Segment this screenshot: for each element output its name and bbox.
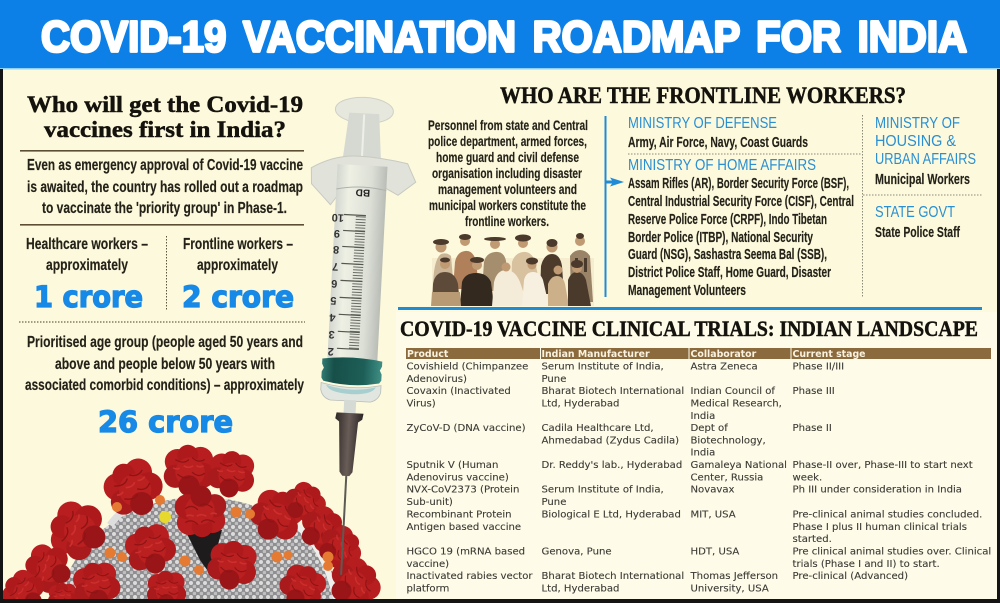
- row: NVX-CoV2373: Ph III under consideration in India: [792, 484, 962, 496]
- table header row: Indian Manufacturer: [542, 349, 650, 360]
- row: NVX-CoV2373: NVX-CoV2373 (Protein: [406, 484, 519, 496]
- stat: healthcare workers: [26, 236, 148, 314]
- group: ministry of home affairs: Reserve Police Force (CRPF), Indo Tibetan: [628, 212, 827, 228]
- row: Covaxin: Ltd, Hyderabad: [542, 398, 619, 410]
- table header row: Current stage: [792, 349, 866, 360]
- row: HGCO 19: [406, 546, 991, 570]
- row: Covaxin: Indian Council of: [690, 386, 775, 397]
- row: Covishield: Covishield (Chimpanzee: [406, 362, 528, 372]
- needle neck: [344, 400, 356, 414]
- row: ZyCoV-D: Cadila Healthcare Ltd,: [542, 423, 654, 434]
- group: ministry of home affairs: [628, 157, 854, 299]
- row: NVX-CoV2373: Serum Institute of India,: [542, 484, 664, 496]
- row: Recombinant Protein: Biological E Ltd, Hyderabad: [542, 510, 681, 520]
- row: HGCO 19: trials (Phase I and II) to start.: [792, 559, 940, 570]
- frontline description: home guard and civil defense: [436, 149, 579, 165]
- icon: syringe: 4: [328, 311, 336, 323]
- row: ZyCoV-D: Phase II: [792, 423, 832, 434]
- row: Covaxin: Phase III: [792, 386, 835, 397]
- row: Inactivated rabies vector: Pre-clinical (Advanced): [792, 571, 908, 582]
- frontline description: management volunteers and: [438, 181, 577, 197]
- row: Covishield: Phase II/III: [792, 362, 844, 372]
- row: NVX-CoV2373: Pune: [542, 497, 566, 508]
- group: ministry of home affairs: District Police Staff, Home Guard, Disaster: [628, 265, 831, 281]
- front row: [432, 272, 460, 306]
- row: Recombinant Protein: [406, 510, 982, 545]
- frontline description: organisation including disaster: [432, 165, 582, 181]
- stat: frontline workers: Frontline workers –: [183, 236, 293, 253]
- back row: [433, 253, 454, 290]
- frontline description: [428, 117, 588, 229]
- frontline description: municipal workers constitute the: [429, 197, 586, 213]
- row: HGCO 19: Pre clinical animal studies over. Clinical: [792, 546, 991, 558]
- row: ZyCoV-D: ZyCoV-D (DNA vaccine): [406, 423, 526, 434]
- stat: frontline workers: approximately: [197, 257, 278, 274]
- row: Sputnik V: Sputnik V (Human: [406, 460, 498, 471]
- row: Covishield: Pune: [542, 374, 566, 385]
- icon: syringe: [290, 95, 420, 578]
- group: ministry of housing and urban affairs: Municipal Workers: [875, 172, 970, 188]
- group: ministry of defense: [628, 115, 808, 151]
- needle: [340, 475, 347, 575]
- barrel: [327, 164, 388, 361]
- table header row: Collaborator: [690, 349, 757, 360]
- row: Sputnik V: week.: [792, 472, 822, 484]
- table header row: Product: [407, 349, 449, 360]
- icon: syringe: 7: [332, 260, 339, 272]
- brand mark: BD: [355, 186, 370, 198]
- group: ministry of housing and urban affairs: URBAN AFFAIRS: [875, 151, 976, 168]
- intro paragraph: Even as emergency approval of Covid-19 vaccine: [27, 157, 303, 174]
- stat: prioritised age group: associated comorbid conditions) – approximately: [25, 377, 304, 394]
- row: HGCO 19: Genova, Pune: [542, 546, 612, 558]
- group: ministry of defense: MINISTRY OF DEFENSE: [628, 115, 777, 132]
- row: Covaxin: [406, 386, 835, 422]
- group: state government: STATE GOVT: [875, 204, 955, 221]
- row: Recombinant Protein: Phase I plus II human clinical trials: [792, 522, 967, 533]
- barrel tip: [320, 383, 381, 403]
- row: ZyCoV-D: Biotechnology,: [690, 436, 766, 446]
- stat: frontline workers: 2 crore: [182, 280, 294, 314]
- row: Covishield: Serum Institute of India,: [542, 362, 664, 372]
- needle hub: [332, 412, 364, 477]
- row: Sputnik V: Center, Russia: [690, 472, 763, 484]
- header banner: [0, 0, 1000, 70]
- row: Sputnik V: [406, 460, 973, 484]
- row: Sputnik V: Phase-II over, Phase-III to start next: [792, 460, 973, 471]
- row: Recombinant Protein: Pre-clinical animal studies concluded.: [792, 510, 982, 520]
- intro paragraph: [27, 157, 303, 217]
- minor graduations: [354, 216, 361, 350]
- row: ZyCoV-D: India: [690, 448, 715, 458]
- stat: prioritised age group: above and people below 50 years with: [55, 356, 275, 373]
- row: HGCO 19: HDT, USA: [690, 546, 739, 558]
- row: HGCO 19: HGCO 19 (mRNA based: [406, 546, 525, 558]
- finger flange: [309, 154, 417, 209]
- row: Covaxin: Virus): [406, 398, 436, 410]
- frontline description: police department, armed forces,: [428, 133, 587, 149]
- group: ministry of home affairs: Border Police (ITBP), National Security: [628, 230, 813, 246]
- row: Covaxin: India: [690, 411, 715, 422]
- group: ministry of housing and urban affairs: [875, 115, 976, 188]
- panel: who are the frontline workers: [428, 83, 982, 306]
- table: vaccine trials: [406, 348, 991, 594]
- row: Inactivated rabies vector: Bharat Biotech International: [542, 571, 684, 582]
- group: ministry of home affairs: Assam Rifles (AR), Border Security Force (BSF),: [628, 176, 849, 192]
- row: Sputnik V: Gamaleya National: [690, 460, 787, 471]
- row: Inactivated rabies vector: Thomas Jefferson: [690, 571, 778, 582]
- heading: who will get the vaccines: [27, 92, 303, 142]
- panel: who will get the vaccines first: [19, 92, 305, 439]
- row: Covaxin: Medical Research,: [690, 398, 782, 410]
- group: ministry of home affairs: Management Volunteers: [628, 283, 746, 299]
- group: state government: State Police Staff: [875, 225, 960, 241]
- row: Recombinant Protein: Antigen based vaccine: [406, 522, 521, 533]
- row: NVX-CoV2373: Novavax: [690, 484, 735, 496]
- row: Covishield: Adenovirus): [406, 374, 467, 385]
- icon: syringe: 10: [331, 211, 344, 223]
- group: state government: [875, 204, 960, 241]
- icon: syringe: 5: [330, 294, 337, 306]
- intro paragraph: is awaited, the country has rolled out a roadmap: [27, 179, 303, 196]
- intro paragraph: to vaccinate the 'priority group' in Phase-1.: [42, 200, 287, 217]
- major graduations and numbers: [337, 214, 366, 349]
- plunger disc: [335, 96, 394, 125]
- heading: who will get the vaccines: Who will get the Covid-19: [27, 92, 303, 117]
- row: Inactivated rabies vector: [406, 571, 908, 594]
- rubber stopper: [321, 356, 382, 387]
- row: HGCO 19: vaccine): [406, 559, 449, 570]
- illustration: group of frontline workers: [431, 233, 594, 306]
- row: NVX-CoV2373: [406, 484, 962, 508]
- row: Sputnik V: Dr. Reddy's lab., Hyderabad: [542, 460, 682, 471]
- stat: healthcare workers: 1 crore: [34, 280, 143, 314]
- icon: syringe: 8: [333, 243, 339, 255]
- row: Recombinant Protein: MIT, USA: [690, 510, 736, 520]
- panel: clinical trials: [400, 316, 991, 594]
- icon: syringe: 3: [328, 328, 335, 340]
- frontline description: Personnel from state and Central: [428, 117, 588, 133]
- stat: prioritised age group: [25, 334, 304, 439]
- row: Inactivated rabies vector: University, USA: [690, 584, 769, 594]
- stat: healthcare workers: approximately: [46, 257, 128, 274]
- row: Sputnik V: Adenovirus vaccine): [406, 472, 509, 484]
- table background: [396, 312, 1000, 600]
- group: ministry of home affairs: Central Industrial Security Force (CISF), Central: [628, 194, 854, 210]
- row: ZyCoV-D: Ahmedabad (Zydus Cadila): [542, 436, 679, 446]
- stat: prioritised age group: 26 crore: [98, 405, 233, 439]
- row: Covaxin: Covaxin (Inactivated: [406, 386, 511, 397]
- arrow: [606, 178, 624, 186]
- row: ZyCoV-D: Dept of: [690, 423, 728, 434]
- row: Inactivated rabies vector: platform: [406, 584, 449, 594]
- heading: who will get the vaccines: vaccines first in India?: [44, 117, 286, 142]
- group: ministry of defense: Army, Air Force, Navy, Coast Guards: [628, 135, 808, 151]
- stat: healthcare workers: Healthcare workers –: [26, 236, 148, 253]
- group: ministry of housing and urban affairs: HOUSING &: [875, 133, 956, 150]
- row: Inactivated rabies vector: Ltd, Hyderabad: [542, 584, 619, 594]
- heading: frontline workers: WHO ARE THE FRONTLINE WORKERS?: [500, 83, 906, 108]
- icon: coronavirus: [0, 445, 388, 603]
- icon: syringe: 9: [334, 227, 340, 239]
- row: Inactivated rabies vector: Inactivated rabies vector: [406, 571, 533, 582]
- faces: [436, 236, 585, 274]
- hats and hair: [433, 233, 584, 268]
- stat: frontline workers: [182, 236, 294, 314]
- row: ZyCoV-D: [406, 423, 832, 458]
- icon: syringe: 6: [331, 277, 338, 289]
- group: ministry of housing and urban affairs: MINISTRY OF: [875, 115, 960, 132]
- row: Covishield: Astra Zeneca: [690, 362, 758, 372]
- row: Recombinant Protein: started.: [792, 534, 832, 545]
- table header row: [406, 348, 991, 360]
- row: Recombinant Protein: Recombinant Protein: [406, 510, 512, 520]
- plunger rod: [343, 112, 383, 159]
- row: NVX-CoV2373: Sub-unit): [406, 497, 453, 508]
- group: ministry of home affairs: Guard (NSG), Sashastra Seema Bal (SSB),: [628, 247, 827, 263]
- group: ministry of home affairs: MINISTRY OF HOME AFFAIRS: [628, 157, 816, 174]
- row: Covishield: [406, 362, 844, 385]
- row: Covaxin: Bharat Biotech International: [542, 386, 684, 397]
- frontline description: frontline workers.: [465, 213, 549, 229]
- icon: syringe: 2: [327, 345, 334, 357]
- stat: prioritised age group: Prioritised age group (people aged 50 years and: [27, 334, 303, 351]
